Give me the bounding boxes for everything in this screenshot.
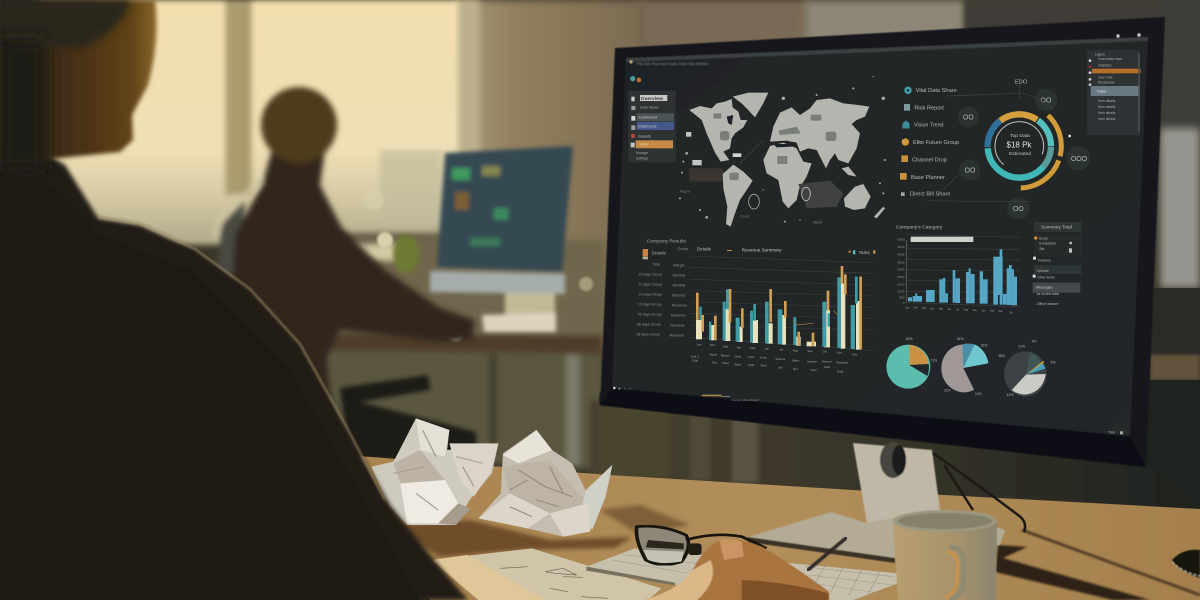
bar chart: monthly volume: Sep xyxy=(973,310,977,312)
axis labels: Oct xyxy=(822,350,827,354)
panel: table left of bar chart: Revenue xyxy=(670,324,685,328)
hair xyxy=(0,0,130,48)
Australia xyxy=(844,184,871,210)
trend line xyxy=(793,310,837,325)
panel: summary sidebar xyxy=(1033,222,1082,306)
panel: donut legend xyxy=(900,87,959,198)
panel: table left of bar chart: 40 days Group xyxy=(638,312,662,316)
bar chart: monthly volume xyxy=(896,225,1020,314)
plant xyxy=(393,235,419,273)
bar chart: revenue: Unit 1 xyxy=(691,354,699,358)
donut chart: OO xyxy=(1013,206,1024,213)
desk headphones cable xyxy=(1172,550,1200,578)
bar chart: monthly volume: Apr xyxy=(931,307,934,310)
panel: donut legend: Risk Report xyxy=(914,105,944,111)
axis labels xyxy=(697,342,858,356)
panel: right sidebar: Item details xyxy=(1098,99,1116,103)
bar chart: revenue: Volume xyxy=(807,359,817,363)
axis labels: Jun xyxy=(764,347,769,351)
Africa xyxy=(763,143,812,208)
panel: top toolbar: File Edit View Insert Data Tools Help Window xyxy=(637,62,709,66)
panel: donut legend: Vision Trend xyxy=(914,123,944,129)
bar chart: revenue: Total xyxy=(722,361,729,365)
dark side of neck xyxy=(0,40,45,170)
bar chart: revenue: Units xyxy=(734,355,742,359)
panel: left navigation: Reports xyxy=(638,134,651,138)
left paper ball xyxy=(371,418,498,525)
monitor base plate xyxy=(748,510,1005,558)
pager dots xyxy=(613,387,631,390)
bar chart: monthly volume: Aug xyxy=(964,309,969,312)
panel: summary sidebar: Office drawer xyxy=(1037,302,1059,306)
background colleague at a desk xyxy=(214,87,605,470)
bar chart: revenue: Return xyxy=(721,353,730,357)
colleague silhouette xyxy=(214,87,475,440)
panel: summary sidebar: Set xyxy=(1039,247,1044,251)
axis labels: Jul xyxy=(779,348,784,352)
donut chart: $18 Pk xyxy=(1007,141,1031,150)
background desk and drawers xyxy=(325,240,605,470)
bar chart: revenue xyxy=(613,250,875,390)
bar chart: revenue: Set xyxy=(793,367,798,371)
panel: table left of bar chart: Monthly xyxy=(673,284,686,288)
pie: grey and blue xyxy=(941,337,989,396)
bar chart: revenue: Units xyxy=(760,356,767,360)
panel: summary sidebar: Summary Total xyxy=(1041,225,1072,230)
bar chart: monthly volume: 20000 xyxy=(897,282,905,286)
panel: table left of bar chart: Details xyxy=(697,247,712,252)
pie: grey, white and multi-colour: 21% xyxy=(1018,344,1025,348)
donut chart: OO xyxy=(965,168,976,175)
bar chart: monthly volume: Company's Category xyxy=(896,225,943,231)
bar chart: monthly volume: Jan xyxy=(906,307,910,309)
panel: right sidebar: Statistics xyxy=(1098,64,1112,68)
panel: summary sidebar: for review table xyxy=(1037,292,1059,296)
bottom status bar xyxy=(702,395,759,402)
bar chart: monthly volume: 25000 xyxy=(897,275,905,279)
dark office chair xyxy=(340,375,476,460)
satellite nodes xyxy=(958,89,1090,220)
panel: summary sidebar: Messages xyxy=(1036,286,1053,290)
bar chart: monthly volume: All xyxy=(1010,311,1013,314)
panel: table left of bar chart: Company Results xyxy=(647,238,687,244)
bar chart: revenue: Volume xyxy=(822,360,832,364)
cable xyxy=(933,453,1025,532)
bar chart: monthly volume: 1000 xyxy=(899,296,905,300)
window with sunset skyline xyxy=(40,0,480,262)
bar chart: revenue: Total xyxy=(760,364,767,368)
screen status: Total xyxy=(1108,431,1115,435)
screen status xyxy=(1108,431,1123,435)
New Zealand xyxy=(874,207,885,218)
panel: summary sidebar: Group xyxy=(1039,236,1048,240)
axis labels: Nov xyxy=(837,350,842,354)
panel: right sidebar: Item details xyxy=(1098,111,1116,115)
panel: table left of bar chart: Revenue xyxy=(670,334,684,338)
monitor chin xyxy=(600,388,1146,467)
bar chart: monthly volume: Nov xyxy=(990,311,995,313)
pie: grey and blue: 15% xyxy=(981,344,987,348)
crumpled paper balls xyxy=(371,418,612,537)
panel: summary sidebar: Finance xyxy=(1038,258,1051,262)
bar chart: monthly volume: 50000 xyxy=(897,238,905,242)
bar chart: revenue: Total xyxy=(823,365,830,369)
foreground person xyxy=(0,0,468,600)
panel: table left of bar chart: Monthly xyxy=(673,274,686,278)
bottom status bar: Consumption Report xyxy=(732,398,759,402)
bar chart: monthly volume: Feb xyxy=(914,308,918,310)
axis labels: Dec xyxy=(852,352,858,356)
glasses xyxy=(636,526,766,565)
panel: table left of bar chart: Revenue Summary xyxy=(742,248,782,253)
Southeast Asia islands xyxy=(842,167,857,177)
desk surface xyxy=(345,455,1200,600)
donut chart: OO xyxy=(1041,98,1052,105)
panel: left navigation: Statements xyxy=(638,124,657,128)
panel: table left of bar chart: Total xyxy=(652,262,660,266)
bar chart: revenue: Total xyxy=(748,363,754,367)
map overlay hexagon xyxy=(798,181,843,208)
back monitor xyxy=(430,146,573,332)
pie: teal and gold: 61% xyxy=(906,337,913,341)
map overlay box xyxy=(689,168,723,182)
panel: donut legend: Elite Future Group xyxy=(913,140,959,146)
panel: table left of bar chart: 11 days Group xyxy=(638,282,662,286)
panel: table left of bar chart: 48 days Group xyxy=(637,322,661,326)
monitor stand xyxy=(748,442,1005,563)
axis labels: Apr xyxy=(737,345,741,349)
map region badges xyxy=(713,113,836,180)
donut chart: Estimated xyxy=(1009,151,1031,157)
world map: Metric xyxy=(813,220,823,224)
North America xyxy=(689,99,747,162)
panel: table left of bar chart xyxy=(636,238,782,338)
panel: table left of bar chart: Revenue xyxy=(672,304,687,308)
pie: grey and blue: 61% xyxy=(957,337,964,341)
hand xyxy=(644,539,829,600)
pie: grey, white and multi-colour xyxy=(998,340,1056,397)
panel: table left of bar chart: 14 days Group xyxy=(638,292,662,296)
bar chart: revenue: Total xyxy=(837,370,843,374)
monitor bezel xyxy=(599,17,1165,467)
bar chart: revenue: Set xyxy=(778,366,783,370)
map data dots xyxy=(679,76,886,223)
panel: left navigation: Overview xyxy=(641,96,663,102)
panel: left navigation xyxy=(628,76,676,162)
pie: teal and gold xyxy=(886,337,937,389)
panel: table left of bar chart: Margin xyxy=(673,263,685,267)
panel: right sidebar: Breakdown xyxy=(1098,80,1115,84)
panel: right sidebar: Sum total xyxy=(1098,75,1113,79)
world map: Ocean xyxy=(740,214,750,218)
pie: grey, white and multi-colour: 38% xyxy=(998,354,1005,358)
paper creases xyxy=(510,467,572,517)
bar chart: revenue: Forecast xyxy=(836,361,848,365)
South America xyxy=(723,165,753,227)
bar chart: monthly volume: May xyxy=(939,309,944,311)
pie charts xyxy=(886,337,1123,435)
bar chart: monthly volume: 0 xyxy=(903,301,905,305)
bar chart: revenue: Total xyxy=(810,368,817,372)
panel: left navigation: Dashboard xyxy=(639,116,657,120)
Greenland xyxy=(733,93,768,117)
pie: grey, white and multi-colour: 41% xyxy=(1007,393,1013,397)
panel: right sidebar: Item details xyxy=(1098,105,1116,109)
panel: table left of bar chart: Planned xyxy=(672,294,685,298)
pie: grey, white and multi-colour: 6% xyxy=(1051,361,1056,365)
bar chart: monthly volume: 40000 xyxy=(897,252,905,256)
chart legend xyxy=(849,250,875,255)
bars xyxy=(696,283,861,350)
chart legend: Tasks xyxy=(859,250,870,255)
map ocean rings xyxy=(749,194,759,209)
donut chart xyxy=(927,80,1090,220)
bar chart: monthly volume: 15000 xyxy=(897,290,905,294)
area under the monitor xyxy=(590,400,1200,510)
panel: summary sidebar: Emissions xyxy=(1039,242,1056,246)
shoulder and back xyxy=(0,150,468,600)
bar chart: monthly volume: 30000 xyxy=(897,268,905,272)
bar chart: monthly volume: 35000 xyxy=(897,260,905,264)
panel: donut legend: Vital Data Share xyxy=(916,88,957,94)
grid xyxy=(690,256,873,351)
panel: right sidebar: Layers xyxy=(1095,52,1105,56)
axis labels: Aug xyxy=(793,348,798,352)
axis labels: Feb xyxy=(710,343,715,347)
bar chart: monthly volume: Jul xyxy=(956,309,960,311)
panel: table left of bar chart: Details xyxy=(652,251,667,256)
bar chart: monthly volume: Dec xyxy=(999,311,1004,313)
paper sheet with sketches xyxy=(432,548,661,600)
panel: right sidebar: Data xyxy=(1097,88,1107,93)
cast shadows on desk xyxy=(400,505,1200,600)
pie: grey and blue: 21% xyxy=(944,389,951,393)
panel: donut legend: Direct Bill Share xyxy=(910,192,951,198)
bar chart: monthly volume: Mar xyxy=(922,307,926,310)
panel: table left of bar chart: 10 days Group xyxy=(638,302,662,306)
axis labels: Sep xyxy=(807,349,813,353)
panel: left navigation: Manage xyxy=(636,151,648,155)
dark inland seas xyxy=(727,115,795,147)
body interior fill xyxy=(0,170,420,600)
bar chart: revenue: Stock xyxy=(710,353,718,357)
bar chart: revenue: Volume xyxy=(775,357,786,361)
paper creases xyxy=(394,430,483,510)
panel: right sidebar: Item details xyxy=(1098,117,1116,121)
pen xyxy=(808,538,846,570)
panel: donut legend: Base Planner xyxy=(911,175,945,181)
axis labels: Mar xyxy=(723,344,728,348)
panel: table left of bar chart: Group xyxy=(677,246,689,251)
panel: left navigation: Data Views xyxy=(640,106,659,110)
bar chart: revenue: Total xyxy=(734,362,741,366)
panel: right sidebar xyxy=(1087,50,1141,135)
world map: Region xyxy=(680,190,691,194)
panel: top toolbar xyxy=(626,33,1148,66)
bokeh lights xyxy=(364,190,593,341)
donut chart: OOO xyxy=(1071,156,1088,163)
screen xyxy=(612,33,1148,436)
axis labels: Jan xyxy=(697,342,702,346)
pie: grey, white and multi-colour: 9% xyxy=(1032,340,1037,344)
panel: left navigation: Settings xyxy=(636,157,648,161)
bar chart: monthly volume: Jun xyxy=(947,309,952,311)
bar chart: monthly volume: Oct xyxy=(982,309,985,312)
panel: donut legend: Channel Drop xyxy=(912,157,947,163)
donut chart: EDO xyxy=(1015,80,1028,86)
bar chart: monthly volume: 45000 xyxy=(897,245,905,249)
rim light on shoulder xyxy=(98,218,385,500)
panel: table left of bar chart: 18 days Group xyxy=(636,332,660,336)
panel: right sidebar: Insert data rows xyxy=(1098,57,1122,61)
world map xyxy=(679,76,886,227)
bar chart: revenue: Total xyxy=(692,359,698,363)
axis labels: May xyxy=(750,346,756,350)
pie: grey and blue: 12% xyxy=(975,392,982,396)
panel: table left of bar chart: Revenue xyxy=(671,314,686,318)
panel: left navigation: Sales xyxy=(639,143,649,147)
panel: summary sidebar: Other items xyxy=(1037,275,1055,279)
bar chart: revenue: Sales xyxy=(792,358,800,362)
bar chart: revenue: Units xyxy=(748,355,755,359)
panel: summary sidebar: Volume xyxy=(1037,269,1049,273)
right paper ball xyxy=(478,430,612,537)
keyboard xyxy=(586,548,898,600)
Eurasia xyxy=(770,98,869,168)
pie: teal and gold: 11% xyxy=(931,359,937,363)
donut chart: OO xyxy=(963,114,974,121)
bar chart: revenue: Set xyxy=(712,360,717,364)
head xyxy=(0,0,156,165)
coffee mug xyxy=(893,510,997,600)
panel: table left of bar chart: 15 days Group xyxy=(638,272,662,276)
donut chart: Top Data xyxy=(1010,133,1030,139)
